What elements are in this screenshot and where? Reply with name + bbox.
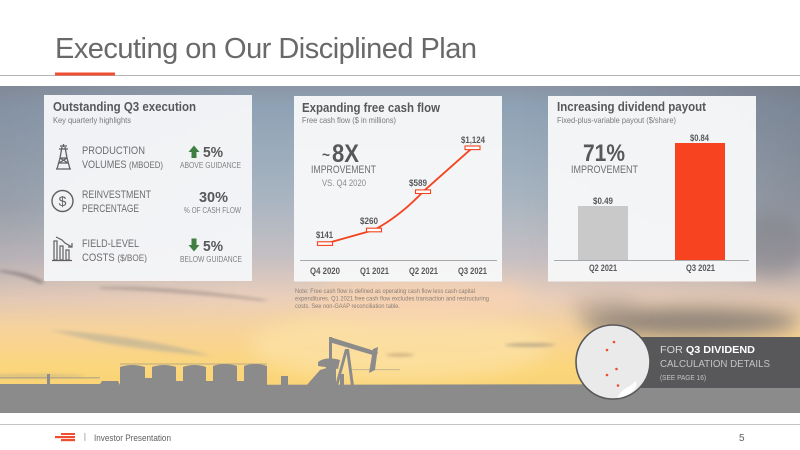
callout: 8X improvement: ~ (322, 147, 330, 164)
callout banner: Q3 dividend: FOR Q3 DIVIDEND (660, 344, 755, 356)
panel heading: Increasing dividend payout (557, 99, 707, 114)
callout: 71% improvement: IMPROVEMENT (571, 164, 638, 176)
metric: 5% above guidance (180, 144, 241, 170)
metric: 30% of cash flow: % OF CASH FLOW (184, 206, 241, 215)
icon: declining bar chart (52, 237, 72, 260)
metric: 5% above guidance: ABOVE GUIDANCE (180, 161, 241, 170)
icon: map circle (576, 325, 650, 399)
panel: outstanding Q3 execution (44, 95, 252, 281)
line chart: $260 (360, 216, 378, 226)
panel heading: Expanding free cash flow (302, 100, 441, 115)
icon: dollar circle (52, 190, 73, 212)
label: production volumes (82, 145, 163, 171)
callout: 71% improvement: 71% (583, 140, 625, 167)
metric: 30% of cash flow: 30% (199, 189, 228, 206)
line chart: Q3 2021 (458, 266, 487, 276)
callout banner: Q3 dividend: (SEE PAGE 16) (660, 373, 706, 382)
title rule (0, 72, 800, 76)
callout banner: Q3 dividend: CALCULATION DETAILS (660, 358, 770, 370)
footnote: Note: Free cash flow is defined as operating cash flow less cash capital (295, 289, 475, 295)
page number: 5 (739, 433, 745, 444)
callout: 8X improvement: VS. Q4 2020 (322, 178, 366, 189)
oilfield silhouette (0, 337, 800, 413)
panel subheading: Free cash flow ($ in millions) (302, 115, 396, 125)
bar chart: $0.84 (690, 133, 709, 143)
line chart: $589 (409, 178, 427, 188)
label: reinvestment percentage: REINVESTMENT (82, 189, 151, 201)
metric: 5% below guidance: BELOW GUIDANCE (180, 255, 242, 264)
label: field-level costs (82, 238, 147, 264)
footnote: costs. See non-GAAP reconciliation table. (295, 304, 400, 310)
metric: 5% below guidance (180, 238, 242, 264)
icon: company logo (55, 433, 75, 441)
callout: 8X improvement (311, 140, 376, 189)
label: reinvestment percentage (82, 189, 151, 215)
footer label: Investor Presentation (94, 433, 171, 443)
label: production volumes: VOLUMES (MBOED) (82, 159, 163, 171)
background: sunset oilfield photo (0, 86, 800, 413)
line chart: Q1 2021 (360, 266, 389, 276)
footer rule (0, 424, 800, 425)
label: production volumes: PRODUCTION (82, 145, 145, 157)
icon: oil derrick (56, 144, 71, 169)
icon: up arrow (188, 146, 200, 158)
label: field-level costs: COSTS ($/BOE) (82, 252, 147, 264)
footnote (295, 289, 489, 310)
panel: increasing dividend payout (548, 96, 756, 282)
icon: dollar circle: $ (59, 193, 67, 209)
metric: 5% above guidance: 5% (203, 144, 223, 161)
bar chart: Q3 2021 (686, 263, 715, 273)
metric: 30% of cash flow (184, 189, 241, 215)
panel subheading: Key quarterly highlights (53, 115, 131, 125)
panel subheading: Fixed-plus-variable payout ($/share) (557, 115, 676, 125)
callout: 8X improvement: IMPROVEMENT (311, 164, 376, 176)
metric: 5% below guidance: 5% (203, 238, 223, 255)
callout: 8X improvement: 8X (332, 140, 359, 168)
panel: expanding free cash flow (294, 96, 502, 282)
line chart (300, 135, 497, 276)
footnote: expenditures. Q1 2021 free cash flow excludes transaction and restructuring (295, 296, 489, 302)
line chart: $1,124 (461, 135, 485, 145)
callout banner: Q3 dividend (640, 337, 800, 388)
label: reinvestment percentage: PERCENTAGE (82, 203, 139, 215)
line chart: $141 (316, 230, 333, 240)
bar chart: $0.49 (593, 196, 613, 206)
bar chart: Q2 2021 (589, 263, 617, 273)
line chart: Q4 2020 (310, 266, 340, 276)
callout: 71% improvement (571, 140, 638, 176)
icon: down arrow (188, 238, 200, 252)
title: Executing on Our Disciplined Plan (55, 33, 477, 65)
label: field-level costs: FIELD-LEVEL (82, 238, 139, 250)
bar chart (554, 133, 749, 273)
line chart: Q2 2021 (409, 266, 438, 276)
panel heading: Outstanding Q3 execution (53, 99, 196, 114)
